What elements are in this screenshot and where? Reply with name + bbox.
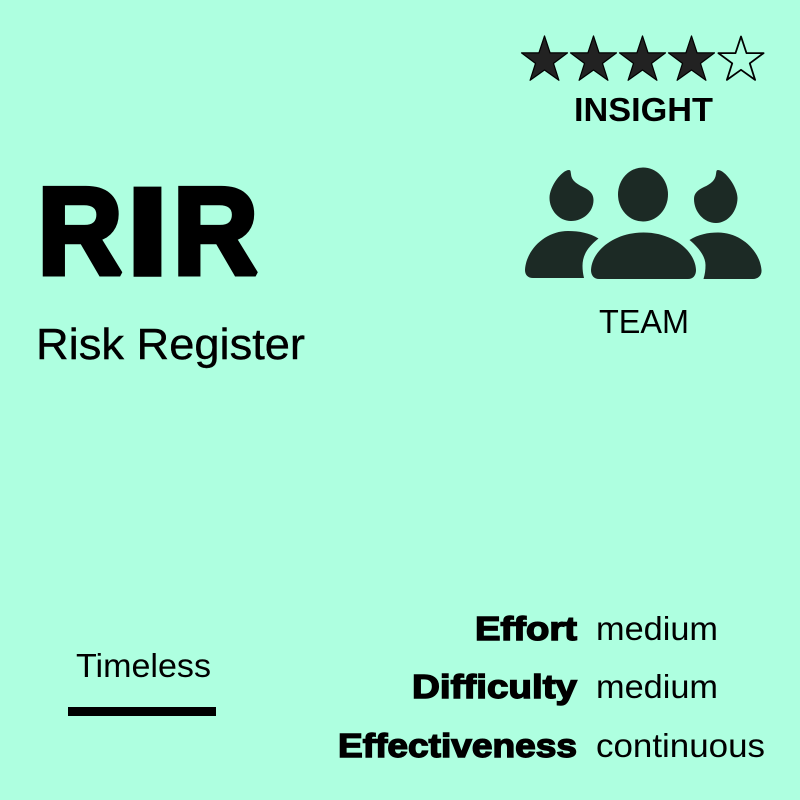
rating row: effort	[475, 610, 718, 647]
rating row: effort: Effort	[475, 610, 577, 647]
timeframe underline bar	[68, 707, 216, 716]
subtitle: Risk Register: Risk Register	[36, 320, 305, 369]
icon: team of three people	[525, 168, 762, 279]
category label: INSIGHT: INSIGHT	[574, 91, 713, 128]
rating row: effectiveness: continuous	[596, 727, 765, 764]
rating row: difficulty: Difficulty	[412, 668, 578, 705]
title: RIR: R	[173, 164, 258, 301]
rating row: effectiveness	[338, 727, 765, 764]
title: RIR	[38, 164, 258, 301]
rating row: difficulty	[412, 668, 718, 705]
star rating: 4 of 5	[522, 36, 764, 80]
label: TEAM: TEAM	[599, 303, 689, 340]
title: RIR: R	[38, 164, 122, 301]
rating row: difficulty: medium	[596, 668, 718, 705]
rating row: effectiveness: Effectiveness	[338, 727, 577, 764]
timeframe label: Timeless: Timeless	[76, 647, 211, 684]
rating row: effort: medium	[596, 610, 718, 647]
title: RIR: I	[127, 164, 168, 301]
